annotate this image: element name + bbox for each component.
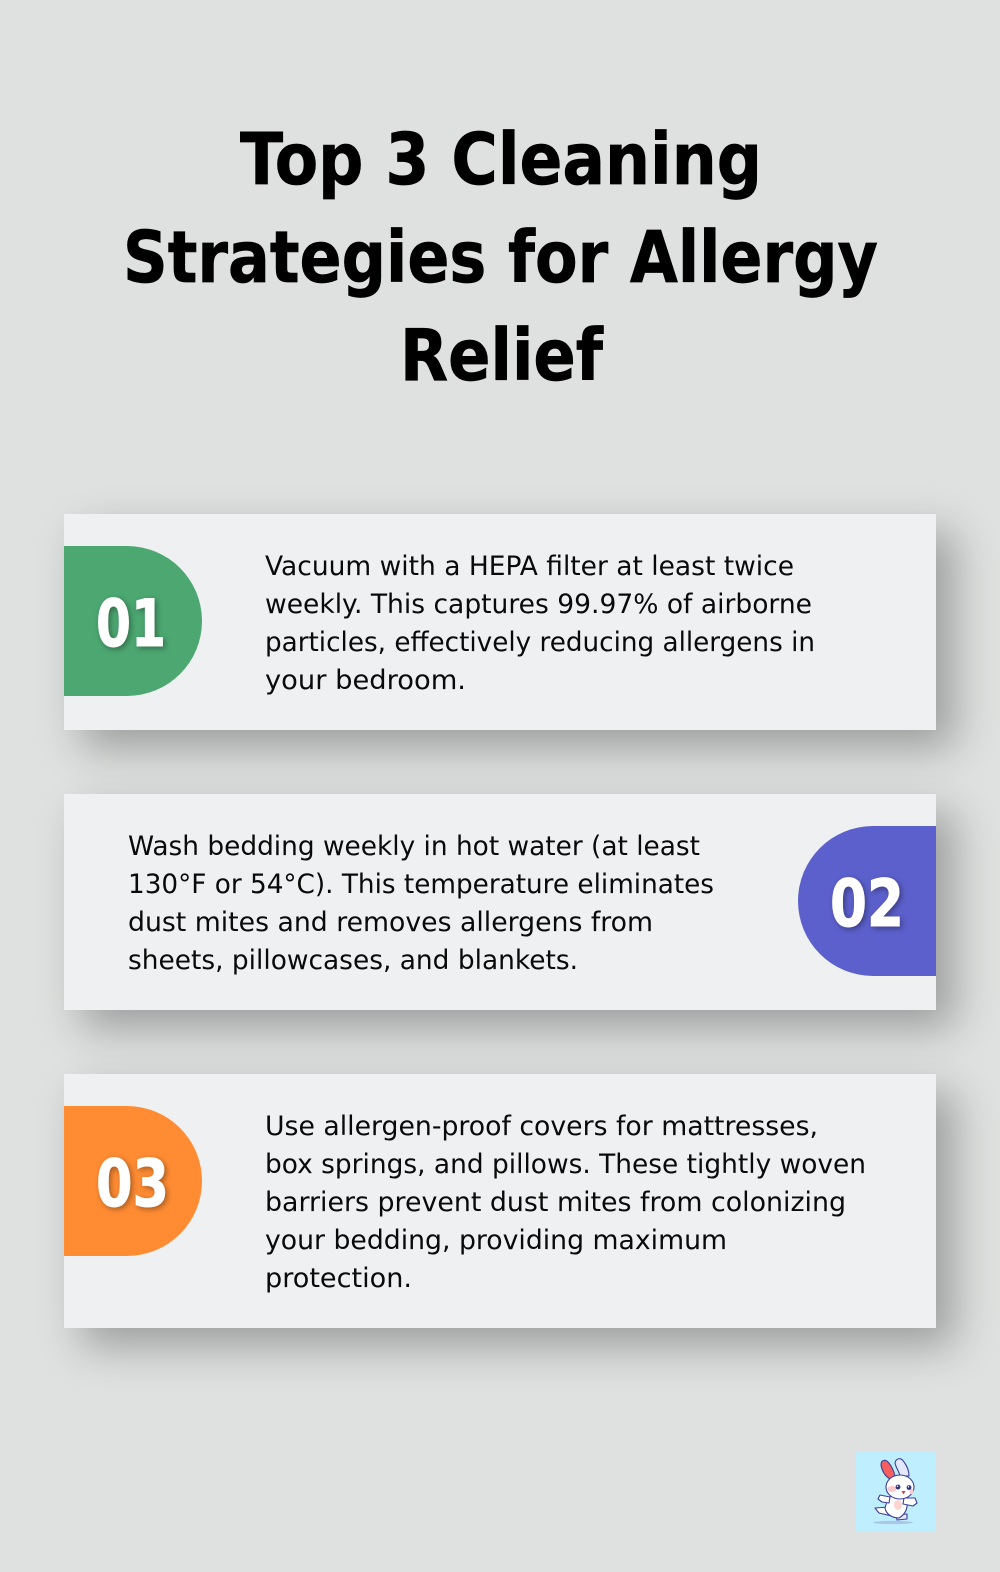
- panel: card 2 background: [64, 794, 936, 1010]
- text: card 1: your bedroom.: [265, 665, 466, 696]
- badge 02: [798, 826, 936, 976]
- title: Relief: [400, 314, 604, 397]
- title: Strategies for Allergy: [123, 216, 878, 299]
- text: card 2: Wash bedding weekly in hot water (at least: [128, 831, 700, 862]
- text: card 3: barriers prevent dust mites from colonizing: [265, 1187, 846, 1218]
- text: card 2: dust mites and removes allergens from: [128, 907, 653, 938]
- title: Top 3 Cleaning: [240, 118, 762, 201]
- text: card 1: particles, effectively reducing allergens in: [265, 627, 815, 658]
- text: card 1: weekly. This captures 99.97% of airborne: [265, 589, 812, 620]
- panel: card 1 background: [64, 514, 936, 730]
- badge 01: 01: [96, 587, 166, 662]
- text: card 1: [265, 551, 815, 696]
- text: card 1: Vacuum with a HEPA filter at least twice: [265, 551, 794, 582]
- badge 03: [64, 1106, 202, 1256]
- text: card 3: [265, 1111, 866, 1294]
- panel: card 3 background: [64, 1074, 936, 1328]
- text: card 3: your bedding, providing maximum: [265, 1225, 727, 1256]
- text: card 3: box springs, and pillows. These tightly woven: [265, 1149, 866, 1180]
- badge 01: [64, 546, 202, 696]
- badge 02: 02: [830, 867, 904, 942]
- title: [123, 118, 878, 397]
- text: card 2: 130°F or 54°C). This temperature eliminates: [128, 869, 714, 900]
- text: card 2: sheets, pillowcases, and blankets.: [128, 945, 578, 976]
- text: card 2: [128, 831, 714, 976]
- icon: running bunny logo: [856, 1452, 936, 1532]
- badge 03: 03: [96, 1147, 169, 1222]
- text: card 3: protection.: [265, 1263, 412, 1294]
- text: card 3: Use allergen-proof covers for mattresses,: [265, 1111, 818, 1142]
